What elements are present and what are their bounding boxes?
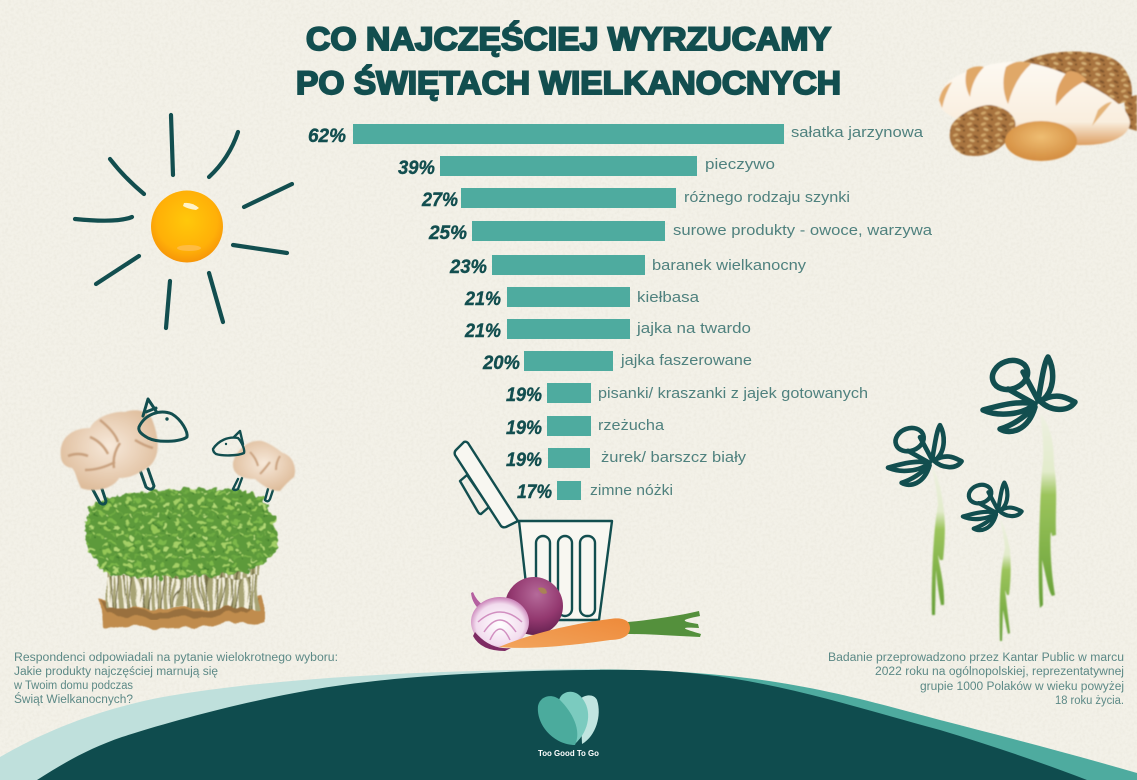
row: jajka faszerowane: jajka faszerowane <box>620 352 752 369</box>
logo: Too Good To Go: Too Good To Go <box>538 749 599 758</box>
footer note: question: Jakie produkty najczęściej marnują się <box>14 666 218 678</box>
trash bin <box>519 521 612 620</box>
logo: Too Good To Go <box>538 692 599 758</box>
row: pisanki: 19% <box>506 385 542 406</box>
row: rzeżucha: 19% <box>506 418 542 439</box>
row: zimne nóżki: zimne nóżki <box>590 482 673 499</box>
footer note: question <box>13 652 338 706</box>
row: pieczywo <box>398 156 775 179</box>
row: surowe produkty: surowe produkty - owoce, warzywa <box>673 222 933 239</box>
row: jajka na twardo <box>464 319 751 342</box>
row: pisanki <box>506 383 868 406</box>
egg yolk sun disc <box>151 190 223 262</box>
flower stems <box>932 413 1056 641</box>
icon: spring flowers <box>888 356 1075 641</box>
footer note: methodology: 2022 roku na ogólnopolskiej, reprezentatywnej <box>875 666 1124 678</box>
row: sałatka jarzynowa: sałatka jarzynowa <box>791 124 924 141</box>
row: szynki <box>421 188 850 211</box>
row: żurek: 19% <box>506 450 542 471</box>
row: kiełbasa: kiełbasa <box>637 289 700 306</box>
bar chart <box>308 124 933 503</box>
row: jajka faszerowane: 20% <box>482 353 520 374</box>
footer note: methodology: Badanie przeprowadzono przez Kantar Public w marcu <box>828 652 1124 664</box>
big sheep <box>61 399 187 504</box>
row: pieczywo: 39% <box>398 158 435 179</box>
bin lid <box>455 442 518 527</box>
row: rzeżucha <box>506 416 665 439</box>
row: kiełbasa: 21% <box>464 289 501 310</box>
flower heads <box>888 356 1075 530</box>
row: baranek wielkanocny: 23% <box>449 257 487 278</box>
carrot <box>499 611 701 648</box>
bottom hill <box>0 669 1137 780</box>
row: zimne nóżki <box>517 481 673 503</box>
title: CO NAJCZĘŚCIEJ WYRZUCAMY <box>306 21 831 57</box>
row: baranek wielkanocny: baranek wielkanocny <box>652 257 807 274</box>
row: surowe produkty: 25% <box>428 223 467 244</box>
row: żurek: żurek/ barszcz biały <box>601 449 747 466</box>
footer note: question: Respondenci odpowiadali na pytanie wielokrotnego wyboru: <box>14 652 338 664</box>
footer note: methodology: grupie 1000 Polaków w wieku powyżej <box>920 681 1124 693</box>
row: kiełbasa <box>464 287 700 310</box>
icon: sun <box>75 115 292 328</box>
row: jajka faszerowane <box>482 351 752 374</box>
row: pieczywo: pieczywo <box>705 156 775 173</box>
row: pisanki: pisanki/ kraszanki z jajek gotowanych <box>598 385 868 402</box>
onion <box>471 577 563 651</box>
row: zimne nóżki: 17% <box>517 482 552 503</box>
footer note: methodology <box>828 652 1124 707</box>
cress <box>86 489 278 628</box>
row: szynki: 27% <box>421 190 458 211</box>
small sheep <box>213 431 295 501</box>
icon: bread <box>939 52 1137 161</box>
row: sałatka jarzynowa: 62% <box>308 126 346 147</box>
row: baranek wielkanocny <box>449 255 807 278</box>
row: szynki: różnego rodzaju szynki <box>684 189 850 206</box>
footer note: methodology: 18 roku życia. <box>1055 695 1124 707</box>
sun rays <box>75 115 292 328</box>
icon: cress with sheep <box>61 399 295 628</box>
row: sałatka jarzynowa <box>308 124 924 147</box>
icon: trash bin with vegetables <box>455 442 701 651</box>
title: PO ŚWIĘTACH WIELKANOCNYCH <box>296 65 841 101</box>
title <box>296 21 841 101</box>
row: rzeżucha: rzeżucha <box>598 417 665 434</box>
row: żurek <box>506 448 747 471</box>
row: jajka na twardo: jajka na twardo <box>636 320 751 337</box>
row: surowe produkty <box>428 221 933 244</box>
footer note: question: Świąt Wielkanocnych? <box>14 693 133 706</box>
footer note: question: w Twoim domu podczas <box>13 680 133 692</box>
row: jajka na twardo: 21% <box>464 321 501 342</box>
